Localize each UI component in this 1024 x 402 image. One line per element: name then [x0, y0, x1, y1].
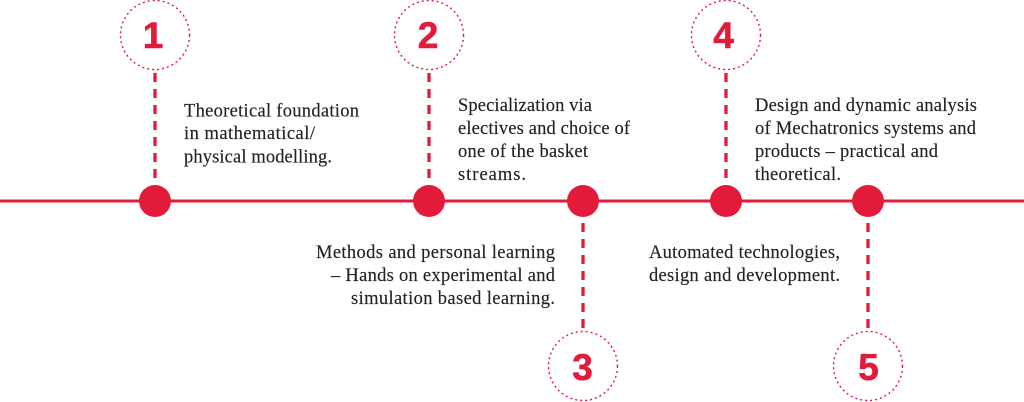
badge 5 [834, 332, 902, 400]
connector 3 [581, 223, 585, 331]
text 3: simulation based learning. [351, 289, 555, 309]
text 2: streams. [458, 165, 526, 185]
badge 2 [394, 0, 464, 70]
text 3: – Hands on experimental and [330, 266, 556, 286]
connector 2 [427, 70, 431, 178]
text 2: electives and choice of [458, 119, 631, 139]
connector 4 [724, 70, 728, 178]
text 4: products – practical and [755, 142, 939, 162]
connector 5 [866, 223, 870, 331]
marker 2 [413, 185, 445, 217]
badge 1: 1 [143, 15, 163, 56]
milestone 4 [692, 0, 977, 217]
milestone 2 [394, 0, 631, 217]
badge 4 [692, 0, 760, 70]
text 4: of Mechatronics systems and [755, 119, 977, 139]
badge 3: 3 [572, 347, 593, 388]
connector 1 [153, 70, 157, 178]
milestone 1 [120, 0, 359, 217]
text 5: Automated technologies, [649, 243, 840, 263]
marker 5 [852, 185, 884, 217]
marker 1 [139, 185, 171, 217]
text 1: Theoretical foundation [184, 102, 359, 122]
badge 5: 5 [858, 347, 879, 388]
text 2: one of the basket [458, 142, 589, 162]
text 1: physical modelling. [184, 148, 332, 168]
text 4: Design and dynamic analysis [755, 96, 977, 116]
marker 3 [567, 185, 599, 217]
marker 4 [710, 185, 742, 217]
badge 4: 4 [713, 15, 734, 56]
text 4: theoretical. [755, 165, 841, 185]
text 3: Methods and personal learning [316, 243, 555, 263]
timeline axis [0, 200, 1024, 202]
text 2: Specialization via [458, 96, 592, 116]
milestone 3 [316, 185, 618, 400]
badge 1 [120, 0, 190, 70]
milestone 5 [649, 185, 902, 400]
badge 3 [548, 332, 618, 400]
badge 2: 2 [418, 15, 438, 56]
text 1: in mathematical/ [184, 124, 316, 144]
text 5: design and development. [649, 266, 840, 286]
